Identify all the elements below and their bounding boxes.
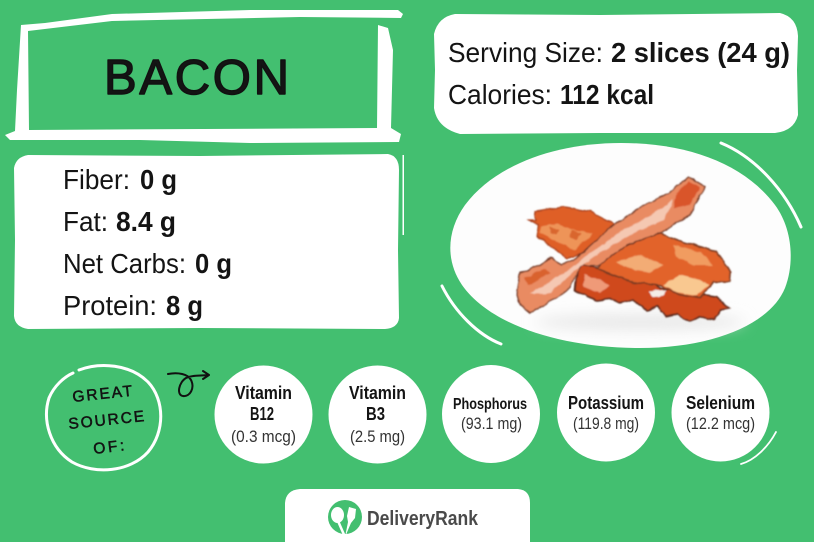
white oval [450,143,791,348]
OF:: OF: [92,437,125,458]
fat line: Fat: [63,206,108,237]
nutrient: potassium: (119.8 mg) [573,414,639,433]
nutrient: vitamin B3: B3 [366,404,385,424]
icon: spoon and fork [328,500,362,537]
serving size line: 2 slices (24 g) [611,37,790,68]
decorative arc: upper right of oval [721,143,801,227]
decorative arc: under selenium [741,432,776,464]
nutrient: vitamin B12 [214,366,312,464]
nutrient: selenium: (12.2 mcg) [686,414,755,433]
nutrient: selenium: Selenium [686,393,755,413]
hand-drawn circle [47,366,161,470]
nutrient: phosphorus: Phosphorus [453,396,527,413]
serving size line [448,37,790,68]
nutrient: phosphorus: (93.1 mg) [461,414,522,433]
protein line: Protein: [63,290,157,321]
logo panel: DeliveryRank [285,489,530,542]
fat line [63,206,176,237]
great source of badge [47,366,161,470]
GREAT: GREAT [72,383,134,406]
bacon photo in white oval [450,143,791,348]
nutrient: potassium [557,364,655,462]
fiber line: Fiber: [63,164,130,195]
oval shadow [535,314,745,330]
logo background [285,489,530,542]
panel background [434,13,798,134]
nutrient: selenium [672,364,770,462]
serving size line: Serving Size: [448,37,603,68]
net carbs line: Net Carbs: [63,248,186,279]
panel: serving size and calories [434,13,798,134]
wordmark: DeliveryRank [367,508,479,530]
nutrient: vitamin B3 [328,366,426,464]
protein line: 8 g [166,290,203,321]
calories line [448,79,654,110]
fiber line: 0 g [140,164,177,195]
panel: macronutrients [14,154,404,329]
nutrient: vitamin B12: B12 [250,404,274,424]
SOURCE: SOURCE [68,408,145,433]
panel background [14,154,399,329]
title: BACON: BACON [104,51,289,105]
decorative arc: lower left of oval [442,286,501,344]
fat line: 8.4 g [116,206,176,237]
brush frame [5,10,403,143]
nutrient: vitamin B3: (2.5 mg) [350,427,405,446]
bacon strips [517,177,731,322]
protein line [63,290,203,321]
nutrient: phosphorus [442,365,540,463]
calories line: Calories: [448,79,552,110]
nutrient: potassium: Potassium [568,393,644,413]
title frame with heading [5,10,403,143]
nutrient: vitamin B3: Vitamin [349,383,406,403]
net carbs line: 0 g [195,248,232,279]
nutrient: vitamin B12: (0.3 mcg) [231,427,296,446]
nutrient: vitamin B12: Vitamin [235,383,292,403]
arrow: loop pointing to nutrients [168,371,209,396]
calories line: 112 kcal [560,79,654,110]
fiber line [63,164,177,195]
